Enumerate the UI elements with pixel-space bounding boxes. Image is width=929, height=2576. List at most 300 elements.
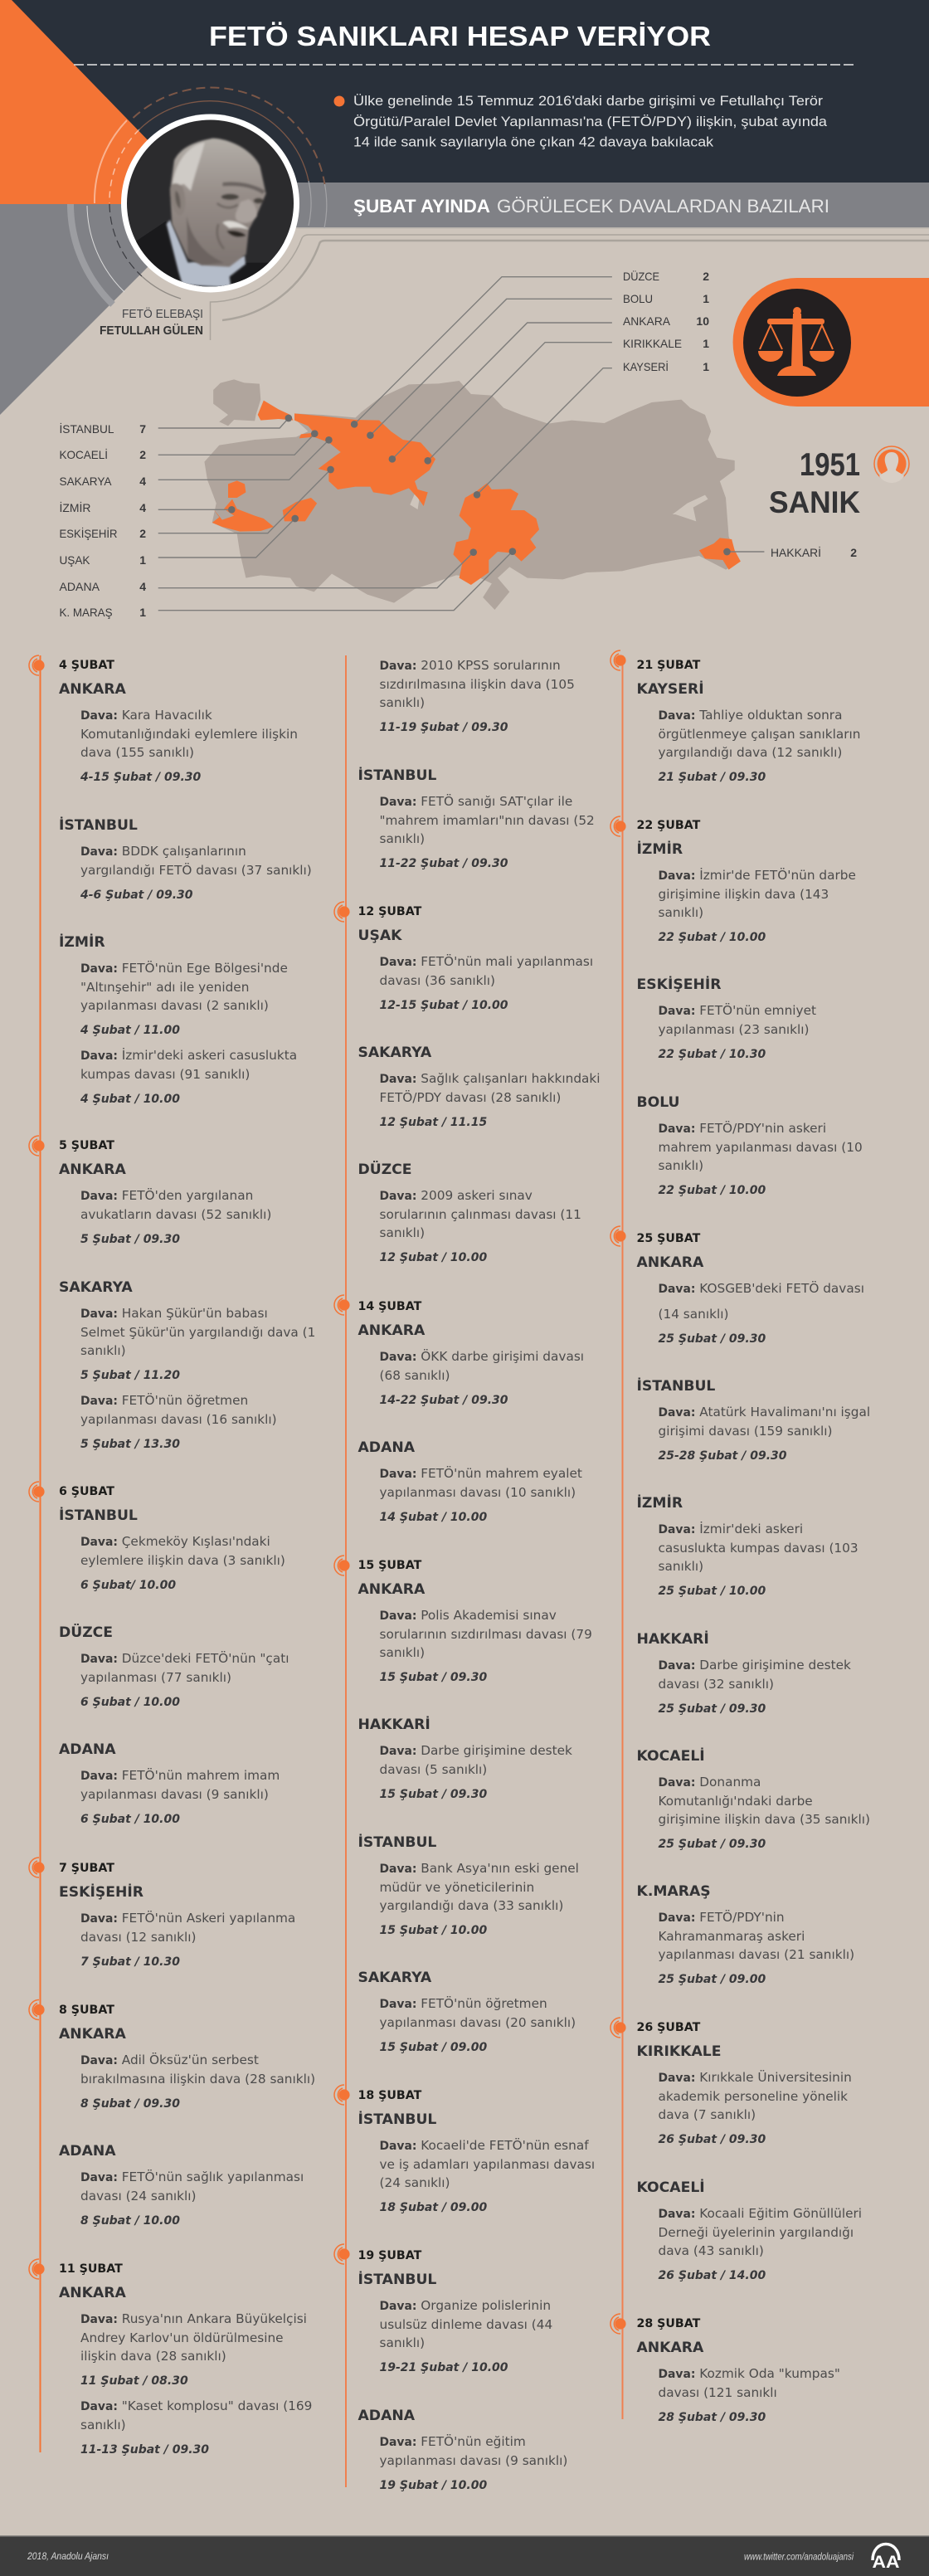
entry: 12 Şubat Uşak: 12-15 Şubat / 10.00 (380, 999, 508, 1012)
entry: Adana eğitim: Dava: FETÖ'nün eğitim (380, 2434, 526, 2449)
entry: 28 Şubat Ankara: Dava: Kozmik Oda "kumpas" (659, 2366, 840, 2381)
title: FETÖ SANIKLARI HESAP VERİYOR (209, 21, 711, 51)
entry: İstanbul Atatürk Havalimanı: girişimi davası (159 sanıklı) (659, 1424, 832, 1439)
entry: İstanbul Atatürk Havalimanı: Dava: Atatürk Havalimanı'nı işgal (659, 1405, 870, 1419)
entry: 11 Şubat Ankara: sanıklı) (80, 2418, 126, 2432)
map labels left (60, 421, 146, 619)
entry: İstanbul Bank Asya: yargılandığı dava (33 sanıklı) (380, 1898, 563, 1913)
timeline rail column 3 (622, 655, 624, 2419)
map base: Turkey land (204, 379, 741, 610)
entry: Eskişehir emniyet: ESKİŞEHİR (637, 976, 721, 993)
icon: person (874, 446, 909, 483)
entry: Sakarya öğretmen: SAKARYA (358, 1970, 431, 1986)
band heading (353, 196, 829, 217)
entry: 14 Şubat Ankara (358, 1300, 584, 1407)
entry: 12 Şubat Uşak: UŞAK (358, 928, 401, 944)
entry: Kocaeli Donanma: Dava: Donanma (659, 1775, 761, 1790)
logo: Anadolu Ajansı (873, 2544, 899, 2572)
entry: Sakarya: Dava: FETÖ'nün öğretmen (80, 1393, 248, 1408)
entry: Adana eyalet: Dava: FETÖ'nün mahrem eyalet (380, 1466, 582, 1481)
entry: Adana eyalet (358, 1439, 582, 1524)
entry: Sakarya sağlık (358, 1045, 601, 1129)
gray band (0, 183, 929, 415)
entry: Kocaeli Eğitim Gönüllüleri: Dava: Kocaali Eğitim Gönüllüleri (659, 2206, 862, 2221)
entry: Düzce sınav: sorularının çalınması davası (11 (380, 1207, 581, 1222)
entry: İstanbul SAT: Dava: FETÖ sanığı SAT'çılar ile (380, 794, 572, 809)
entry: 19 Şubat İstanbul: 19 ŞUBAT (358, 2249, 421, 2262)
entry: Düzce: Dava: Düzce'deki FETÖ'nün "çatı (80, 1651, 289, 1666)
entry: İstanbul Bank Asya: İSTANBUL (358, 1833, 436, 1850)
entry: Kocaeli Eğitim Gönüllüleri (637, 2179, 862, 2282)
entry: İzmir casusluk: Dava: İzmir'deki askeri (659, 1522, 803, 1536)
map labels left: UŞAK (60, 553, 90, 567)
map labels left: 1 (139, 606, 146, 619)
entry: 19 Şubat İstanbul: usulsüz dinleme davası (44 (380, 2317, 552, 2332)
entry: Adana: Dava: FETÖ'nün mahrem imam (80, 1768, 280, 1783)
entry: Hakkari 32 sanıklı: davası (32 sanıklı) (659, 1677, 774, 1692)
entry: 18 Şubat İstanbul: ve iş adamları yapılanması davası (380, 2157, 595, 2172)
entry: Bolu: BOLU (637, 1094, 680, 1111)
entry: Eskişehir emniyet (637, 976, 816, 1061)
map labels left: ESKİŞEHİR (60, 526, 118, 540)
entry: K.Maraş (637, 1883, 854, 1986)
entry: İstanbul BDDK: Dava: BDDK çalışanlarının (80, 843, 246, 858)
map labels right: BOLU (623, 292, 653, 305)
entry: 6 Şubat İstanbul: 6 Şubat/ 10.00 (80, 1578, 176, 1591)
total defendants counter (769, 447, 860, 519)
map labels right: HAKKARİ (771, 545, 821, 559)
entry: 28 Şubat Ankara: davası (121 sanıklı (659, 2385, 777, 2400)
map labels left: 2 (139, 448, 146, 461)
rings around portrait (71, 88, 929, 340)
entry: 21 Şubat Kayseri: yargılandığı dava (12 sanıklı) (659, 745, 842, 760)
entry: 18 Şubat İstanbul: (24 sanıklı) (380, 2175, 450, 2190)
timeline markers column 2 (334, 902, 350, 2264)
map labels right: 1 (703, 360, 709, 373)
entry: Adana: yapılanması davası (9 sanıklı) (80, 1787, 269, 1802)
band lower edge (187, 227, 929, 229)
entry: İstanbul SAT: "mahrem imamları"nın davası (52 (380, 813, 595, 828)
timeline rail column 1 (40, 655, 41, 2452)
entry: 11 Şubat Ankara: 11 ŞUBAT (59, 2262, 123, 2276)
entry: Adana (59, 1741, 280, 1826)
entry: Sakarya öğretmen (358, 1970, 576, 2054)
entry: İzmir: Dava: İzmir'deki askeri casuslukta (80, 1048, 297, 1063)
entry: 14 Şubat Ankara: Dava: ÖKK darbe girişimi davası (380, 1349, 584, 1364)
map labels left: SAKARYA (60, 475, 112, 488)
map labels left: İSTANBUL (60, 421, 114, 436)
entry: 2010 KPSS dava: sanıklı) (380, 695, 425, 710)
entry: 2010 KPSS dava: sızdırılmasına ilişkin dava (105 (380, 677, 575, 692)
entry: 15 Şubat Ankara: sanıklı) (380, 1645, 425, 1660)
entry: K.Maraş: Dava: FETÖ/PDY'nin (659, 1910, 785, 1925)
orange corner shape (0, 0, 210, 204)
entry: Düzce: DÜZCE (59, 1624, 113, 1641)
entry: 26 Şubat Kırıkkale (637, 2021, 852, 2146)
entry: 19 Şubat İstanbul: İSTANBUL (358, 2272, 436, 2288)
entry: 5 Şubat Ankara: ANKARA (59, 1161, 126, 1178)
entry: 25 Şubat Ankara (637, 1232, 864, 1346)
entry: 18 Şubat İstanbul: Dava: Kocaeli'de FETÖ'nün esnaf (380, 2138, 589, 2153)
entry: 4 Şubat Ankara: 4-15 Şubat / 09.30 (80, 771, 201, 784)
orange pill with scales icon (733, 278, 929, 407)
entry: 25 Şubat Ankara: Dava: KOSGEB'deki FETÖ davası (659, 1281, 864, 1296)
entry: 22 Şubat İzmir: girişimine ilişkin dava (143 (659, 887, 829, 902)
entry: 4 Şubat Ankara: Komutanlığındaki eylemlere ilişkin (80, 727, 298, 742)
map labels right: KIRIKKALE (623, 337, 682, 350)
entry: Sakarya: SAKARYA (59, 1279, 133, 1296)
entry: 26 Şubat Kırıkkale: Dava: Kırıkkale Üniversitesinin (659, 2070, 852, 2085)
entry: 11 Şubat Ankara: Dava: "Kaset komplosu" davası (169 (80, 2398, 312, 2413)
entry: 19 Şubat İstanbul: Dava: Organize polislerinin (380, 2298, 551, 2313)
entry: 5 Şubat Ankara (59, 1139, 271, 1246)
entry: İzmir: İZMİR (59, 934, 105, 951)
entry: Kocaeli Eğitim Gönüllüleri: Derneği üyelerinin yargılandığı (659, 2225, 854, 2240)
entry: 14 Şubat Ankara: (68 sanıklı) (380, 1368, 450, 1383)
entry: 11 Şubat Ankara: ANKARA (59, 2285, 126, 2301)
entry: Kocaeli Eğitim Gönüllüleri: KOCAELİ (637, 2179, 705, 2196)
entry: 19 Şubat İstanbul (358, 2249, 552, 2374)
entry: 18 Şubat İstanbul: 18 Şubat / 09.00 (380, 2201, 487, 2214)
entry: Sakarya: Dava: Hakan Şükür'ün babası (80, 1306, 268, 1321)
entry: 18 Şubat İstanbul: 18 ŞUBAT (358, 2089, 421, 2102)
entry: Adana eğitim: ADANA (358, 2408, 415, 2424)
entry: İzmir: kumpas davası (91 sanıklı) (80, 1067, 250, 1082)
entry: Sakarya: 5 Şubat / 13.30 (80, 1438, 180, 1451)
entry: Eskişehir emniyet: Dava: FETÖ'nün emniyet (659, 1003, 816, 1018)
band heading: ŞUBAT AYINDA (353, 196, 490, 217)
entry: İstanbul Bank Asya: müdür ve yöneticilerinin (380, 1880, 534, 1895)
entry: 26 Şubat Kırıkkale: akademik personeline yönelik (659, 2089, 848, 2104)
entry: İstanbul BDDK: İSTANBUL (59, 816, 138, 833)
entry: İzmir (59, 934, 297, 1106)
entry: 12 Şubat Uşak (358, 905, 593, 1012)
map labels left: 2 (139, 527, 146, 540)
entry: İzmir casusluk: sanıklı) (659, 1559, 703, 1574)
entry: İzmir casusluk (637, 1495, 858, 1598)
map labels left: KOCAELİ (60, 447, 108, 461)
band heading: GÖRÜLECEK DAVALARDAN BAZILARI (497, 196, 829, 217)
entry: 12 Şubat Uşak: Dava: FETÖ'nün mali yapılanması (380, 954, 593, 969)
entry: Düzce sınav: DÜZCE (358, 1161, 412, 1178)
entry: Adana sağlık: ADANA (59, 2143, 116, 2160)
entry: Adana sağlık: Dava: FETÖ'nün sağlık yapılanması (80, 2169, 304, 2184)
entry: İstanbul SAT: 11-22 Şubat / 09.30 (380, 857, 508, 870)
map labels left: 4 (139, 501, 146, 514)
entry: İstanbul Bank Asya: Dava: Bank Asya'nın eski genel (380, 1860, 579, 1875)
entry: 7 Şubat Eskişehir: Dava: FETÖ'nün Askeri yapılanma (80, 1910, 295, 1925)
entry: Düzce: yapılanması (77 sanıklı) (80, 1670, 231, 1685)
total defendants counter: SANIK (769, 485, 860, 519)
entry: İzmir: yapılanması davası (2 sanıklı) (80, 998, 269, 1013)
entry: 22 Şubat İzmir: Dava: İzmir'de FETÖ'nün darbe (659, 868, 856, 883)
entry: Bolu: Dava: FETÖ/PDY'nin askeri (659, 1121, 826, 1136)
entry: 4 Şubat Ankara: 4 ŞUBAT (59, 659, 114, 672)
entry: Adana eğitim: 19 Şubat / 10.00 (380, 2479, 487, 2492)
entry: Kocaeli Eğitim Gönüllüleri: dava (43 sanıklı) (659, 2243, 764, 2258)
entry: 15 Şubat Ankara: 15 Şubat / 09.30 (380, 1671, 487, 1684)
intro text block: Ülke genelinde 15 Temmuz 2016'daki darbe girişimi ve Fetullahçı Terör (353, 93, 823, 109)
entry: 22 Şubat İzmir (637, 819, 856, 944)
entry: Adana sağlık: 8 Şubat / 10.00 (80, 2214, 180, 2228)
entry: 22 Şubat İzmir: İZMİR (637, 841, 683, 858)
entry: 7 Şubat Eskişehir: 7 ŞUBAT (59, 1862, 114, 1875)
lakes (410, 494, 708, 521)
entry: Bolu (637, 1094, 863, 1197)
map labels right: KAYSERİ (623, 359, 669, 373)
entry: 15 Şubat Ankara: Dava: Polis Akademisi sınav (380, 1608, 557, 1623)
entry: 5 Şubat Ankara: avukatların davası (52 sanıklı) (80, 1207, 271, 1222)
entry: Eskişehir emniyet: yapılanması (23 sanıklı) (659, 1022, 809, 1037)
entry: 26 Şubat Kırıkkale: KIRIKKALE (637, 2043, 721, 2060)
entry: 19 Şubat İstanbul: 19-21 Şubat / 10.00 (380, 2361, 508, 2374)
entry: Düzce sınav: sanıklı) (380, 1225, 425, 1240)
entry: 11 Şubat Ankara: 11-13 Şubat / 09.30 (80, 2443, 209, 2457)
entry: 2010 KPSS dava: Dava: 2010 KPSS sorularının (380, 658, 561, 673)
entry: Hakkari 5 sanıklı: Dava: Darbe girişimine destek (380, 1743, 572, 1758)
entry: 6 Şubat İstanbul: Dava: Çekmeköy Kışlası'ndaki (80, 1533, 270, 1548)
entry: 15 Şubat Ankara: sorularının sızdırılması davası (79 (380, 1627, 592, 1642)
entry: 8 Şubat Ankara: Dava: Adil Öksüz'ün serbest (80, 2053, 259, 2067)
entry: 2010 KPSS dava (380, 658, 575, 734)
entry: 28 Şubat Ankara: 28 ŞUBAT (637, 2317, 700, 2330)
entry: Düzce sınav: 12 Şubat / 10.00 (380, 1251, 487, 1264)
entry: 4 Şubat Ankara (59, 659, 298, 784)
entry: 28 Şubat Ankara (637, 2317, 840, 2424)
portrait photo illustration (121, 114, 299, 301)
entry: 6 Şubat İstanbul (59, 1485, 285, 1591)
entry: 14 Şubat Ankara: 14-22 Şubat / 09.30 (380, 1394, 508, 1407)
entry: Bolu: 22 Şubat / 10.00 (659, 1184, 766, 1197)
map labels right: 1 (703, 337, 709, 350)
entry: İstanbul Atatürk Havalimanı: İSTANBUL (637, 1378, 715, 1395)
entry: 12 Şubat Uşak: davası (36 sanıklı) (380, 973, 495, 988)
intro text block: 14 ilde sanık sayılarıyla öne çıkan 42 davaya bakılacak (353, 134, 714, 149)
entry: 4 Şubat Ankara: Dava: Kara Havacılık (80, 708, 212, 723)
entry: 4 Şubat Ankara: ANKARA (59, 681, 126, 698)
entry: Adana eğitim (358, 2408, 567, 2492)
entry: İzmir: Dava: FETÖ'nün Ege Bölgesi'nde (80, 961, 288, 976)
portrait caption (100, 306, 203, 338)
map labels right: 2 (703, 270, 709, 283)
entry: Sakarya: 5 Şubat / 11.20 (80, 1369, 180, 1382)
entry: 6 Şubat İstanbul: eylemlere ilişkin dava (3 sanıklı) (80, 1553, 285, 1568)
entry: Hakkari 32 sanıklı (637, 1631, 851, 1716)
dark header panel (0, 0, 929, 183)
entry: Sakarya sağlık: FETÖ/PDY davası (28 sanıklı) (380, 1090, 561, 1105)
map labels left: ADANA (60, 580, 100, 593)
entry: Sakarya öğretmen: Dava: FETÖ'nün öğretmen (380, 1996, 547, 2011)
entry: Sakarya: yapılanması davası (16 sanıklı) (80, 1412, 277, 1427)
entry: Adana eyalet: yapılanması davası (10 sanıklı) (380, 1485, 576, 1500)
entry: İzmir: 4 Şubat / 10.00 (80, 1093, 180, 1106)
entry: Hakkari 32 sanıklı: HAKKARİ (637, 1631, 709, 1648)
entry: 6 Şubat İstanbul: 6 ŞUBAT (59, 1485, 114, 1498)
entry: Adana eyalet: ADANA (358, 1439, 415, 1456)
entry: Kocaeli Donanma: Komutanlığı'ndaki darbe (659, 1794, 813, 1809)
footer credit: 2018, Anadolu Ajansı (27, 2552, 109, 2562)
entry: İstanbul SAT (358, 767, 595, 870)
entry: 2010 KPSS dava: 11-19 Şubat / 09.30 (380, 721, 508, 734)
entry: Bolu: sanıklı) (659, 1158, 703, 1173)
map labels right: ANKARA (623, 314, 671, 328)
entry: İzmir casusluk: 25 Şubat / 10.00 (659, 1585, 766, 1598)
entry: 8 Şubat Ankara: 8 ŞUBAT (59, 2003, 114, 2016)
entry: İstanbul BDDK (59, 816, 312, 901)
entry: 5 Şubat Ankara: 5 ŞUBAT (59, 1139, 114, 1152)
timeline rail column 2 (345, 655, 347, 2487)
entry: 6 Şubat İstanbul: İSTANBUL (59, 1507, 138, 1523)
entry: 22 Şubat İzmir: 22 Şubat / 10.00 (659, 931, 766, 944)
entry: Kocaeli Eğitim Gönüllüleri: 26 Şubat / 14.00 (659, 2269, 766, 2282)
entry: İzmir casusluk: İZMİR (637, 1495, 683, 1512)
entry: Eskişehir emniyet: 22 Şubat / 10.30 (659, 1048, 766, 1061)
entry: Sakarya öğretmen: yapılanması davası (20 sanıklı) (380, 2015, 576, 2030)
entry: 14 Şubat Ankara: ANKARA (358, 1322, 425, 1339)
entry: İstanbul Atatürk Havalimanı: 25-28 Şubat / 09.30 (659, 1449, 787, 1463)
entry: 11 Şubat Ankara: Andrey Karlov'un öldürülmesine (80, 2330, 284, 2345)
entry: İstanbul BDDK: 4-6 Şubat / 09.30 (80, 888, 193, 901)
entry: 26 Şubat Kırıkkale: 26 Şubat / 09.30 (659, 2133, 766, 2146)
entry: İstanbul SAT: sanıklı) (380, 831, 425, 846)
entry: Sakarya öğretmen: 15 Şubat / 09.00 (380, 2041, 487, 2054)
entry: 18 Şubat İstanbul (358, 2089, 595, 2214)
entry: 18 Şubat İstanbul: İSTANBUL (358, 2111, 436, 2128)
map labels left: K. MARAŞ (60, 606, 113, 619)
intro text block: Örgütü/Paralel Devlet Yapılanması'na (FETÖ/PDY) ilişkin, şubat ayında (353, 114, 828, 129)
map labels right (623, 269, 857, 559)
entry: Hakkari 5 sanıklı: 15 Şubat / 09.30 (380, 1788, 487, 1801)
entry: 15 Şubat Ankara: 15 ŞUBAT (358, 1559, 421, 1572)
map labels right: 10 (696, 314, 709, 328)
map labels right: DÜZCE (623, 269, 659, 283)
entry: Hakkari 5 sanıklı: HAKKARİ (358, 1717, 430, 1733)
map labels left: İZMİR (60, 500, 91, 514)
entry: 21 Şubat Kayseri (637, 659, 860, 784)
entry: 25 Şubat Ankara: ANKARA (637, 1254, 703, 1271)
footer link: www.twitter.com/anadoluajansi (744, 2552, 854, 2562)
total defendants counter: 1951 (800, 447, 860, 483)
portrait caption: FETÖ ELEBAŞI (122, 306, 203, 321)
province pins (228, 415, 731, 556)
entry: 28 Şubat Ankara: 28 Şubat / 09.30 (659, 2411, 766, 2424)
footer bar (0, 2535, 929, 2576)
portrait caption: FETULLAH GÜLEN (100, 324, 203, 338)
map labels right: 2 (850, 546, 857, 559)
map labels left: 1 (139, 553, 146, 567)
entry: Hakkari 5 sanıklı: davası (5 sanıklı) (380, 1762, 487, 1777)
entry: 21 Şubat Kayseri: Dava: Tahliye olduktan sonra (659, 708, 842, 723)
entry: Hakkari 32 sanıklı: Dava: Darbe girişimine destek (659, 1658, 851, 1673)
entry: 8 Şubat Ankara: ANKARA (59, 2026, 126, 2043)
entry: 22 Şubat İzmir: 22 ŞUBAT (637, 819, 700, 832)
entry: 5 Şubat Ankara: Dava: FETÖ'den yargılanan (80, 1188, 253, 1203)
entry: Düzce (59, 1624, 289, 1709)
entry: 7 Şubat Eskişehir: davası (12 sanıklı) (80, 1930, 197, 1945)
entry: Adana: ADANA (59, 1741, 116, 1758)
entry: 21 Şubat Kayseri: 21 ŞUBAT (637, 659, 700, 672)
dashed title rule (74, 64, 855, 66)
entry: Adana sağlık: davası (24 sanıklı) (80, 2189, 197, 2203)
entry: İzmir: "Altınşehir" adı ile yeniden (80, 980, 249, 995)
entry: Sakarya: sanıklı) (80, 1343, 126, 1358)
entry: 22 Şubat İzmir: sanıklı) (659, 905, 703, 920)
map labels right: 1 (703, 292, 709, 305)
entry: 21 Şubat Kayseri: örgütlenmeye çalışan sanıkların (659, 727, 860, 742)
entry: K.Maraş: Kahramanmaraş askeri (659, 1929, 805, 1944)
entry: Düzce sınav (358, 1161, 581, 1264)
entry: İstanbul Atatürk Havalimanı (637, 1377, 870, 1463)
entry: 4 Şubat Ankara: dava (155 sanıklı) (80, 745, 194, 760)
entry: 8 Şubat Ankara: bırakılmasına ilişkin dava (28 sanıklı) (80, 2071, 315, 2086)
entry: 25 Şubat Ankara: 25 ŞUBAT (637, 1232, 700, 1245)
entry: Kocaeli Donanma: 25 Şubat / 09.30 (659, 1838, 766, 1851)
entry: 11 Şubat Ankara: ilişkin dava (28 sanıklı) (80, 2349, 226, 2364)
entry: 26 Şubat Kırıkkale: dava (7 sanıklı) (659, 2107, 756, 2122)
entry: 11 Şubat Ankara: 11 Şubat / 08.30 (80, 2374, 188, 2388)
entry: 7 Şubat Eskişehir (59, 1862, 295, 1968)
entry: İstanbul Bank Asya (358, 1833, 579, 1936)
map of Turkey (158, 277, 764, 611)
entry: K.Maraş: K.MARAŞ (637, 1883, 711, 1900)
highlighted provinces (212, 401, 741, 585)
entry: 14 Şubat Ankara: 14 ŞUBAT (358, 1300, 421, 1313)
entry: Kocaeli Donanma: KOCAELİ (637, 1748, 705, 1765)
map labels left: 4 (139, 580, 146, 593)
entry: 8 Şubat Ankara (59, 2003, 315, 2111)
entry: İzmir: 4 Şubat / 11.00 (80, 1024, 180, 1037)
map labels left: 7 (139, 422, 146, 436)
entry: Adana sağlık (59, 2143, 304, 2228)
entry: İstanbul Bank Asya: 15 Şubat / 10.00 (380, 1923, 487, 1936)
entry: Sakarya sağlık: Dava: Sağlık çalışanları hakkındaki (380, 1071, 601, 1086)
map labels left: 4 (139, 475, 146, 488)
entry: İstanbul BDDK: yargılandığı FETÖ davası (37 sanıklı) (80, 863, 312, 878)
entry: 12 Şubat Uşak: 12 ŞUBAT (358, 905, 421, 918)
entry: Adana eğitim: yapılanması davası (9 sanıklı) (380, 2452, 567, 2467)
entry: 8 Şubat Ankara: 8 Şubat / 09.30 (80, 2097, 180, 2111)
entry: Adana eyalet: 14 Şubat / 10.00 (380, 1511, 487, 1524)
entry: Hakkari 5 sanıklı (358, 1716, 572, 1801)
entry: 25 Şubat Ankara: 25 Şubat / 09.30 (659, 1332, 766, 1346)
leader lines (158, 277, 764, 611)
entry: 19 Şubat İstanbul: sanıklı) (380, 2335, 425, 2350)
entry: 7 Şubat Eskişehir: ESKİŞEHİR (59, 1883, 143, 1900)
entry: 25 Şubat Ankara: (14 sanıklı) (659, 1307, 728, 1322)
entry: İzmir casusluk: casuslukta kumpas davası (103 (659, 1541, 858, 1556)
entry: Kocaeli Donanma: girişimine ilişkin dava (35 sanıklı) (659, 1812, 870, 1827)
entry: 21 Şubat Kayseri: 21 Şubat / 09.30 (659, 771, 766, 784)
entry: 21 Şubat Kayseri: KAYSERİ (637, 681, 704, 698)
entry: Hakkari 32 sanıklı: 25 Şubat / 09.30 (659, 1702, 766, 1716)
entry: Adana: 6 Şubat / 10.00 (80, 1813, 180, 1826)
entry: Düzce sınav: Dava: 2009 askeri sınav (380, 1188, 533, 1203)
intro text block (333, 93, 828, 149)
entry: 11 Şubat Ankara: Dava: Rusya'nın Ankara Büyükelçisi (80, 2311, 307, 2326)
entry: 7 Şubat Eskişehir: 7 Şubat / 10.30 (80, 1955, 180, 1968)
entry: 26 Şubat Kırıkkale: 26 ŞUBAT (637, 2021, 700, 2034)
entry: 11 Şubat Ankara (59, 2262, 312, 2457)
entry: K.Maraş: 25 Şubat / 09.00 (659, 1973, 766, 1986)
timeline markers column 1 (29, 655, 45, 2279)
logo: Anadolu Ajansı: AA (873, 2553, 899, 2572)
timeline markers column 3 (610, 650, 626, 2334)
entry: Düzce: 6 Şubat / 10.00 (80, 1696, 180, 1709)
entry: Sakarya: Selmet Şükür'ün yargılandığı dava (1 (80, 1325, 315, 1340)
entry: Sakarya sağlık: SAKARYA (358, 1045, 431, 1061)
entry: İstanbul SAT: İSTANBUL (358, 767, 436, 784)
entry: K.Maraş: yapılanması davası (21 sanıklı) (659, 1947, 854, 1962)
